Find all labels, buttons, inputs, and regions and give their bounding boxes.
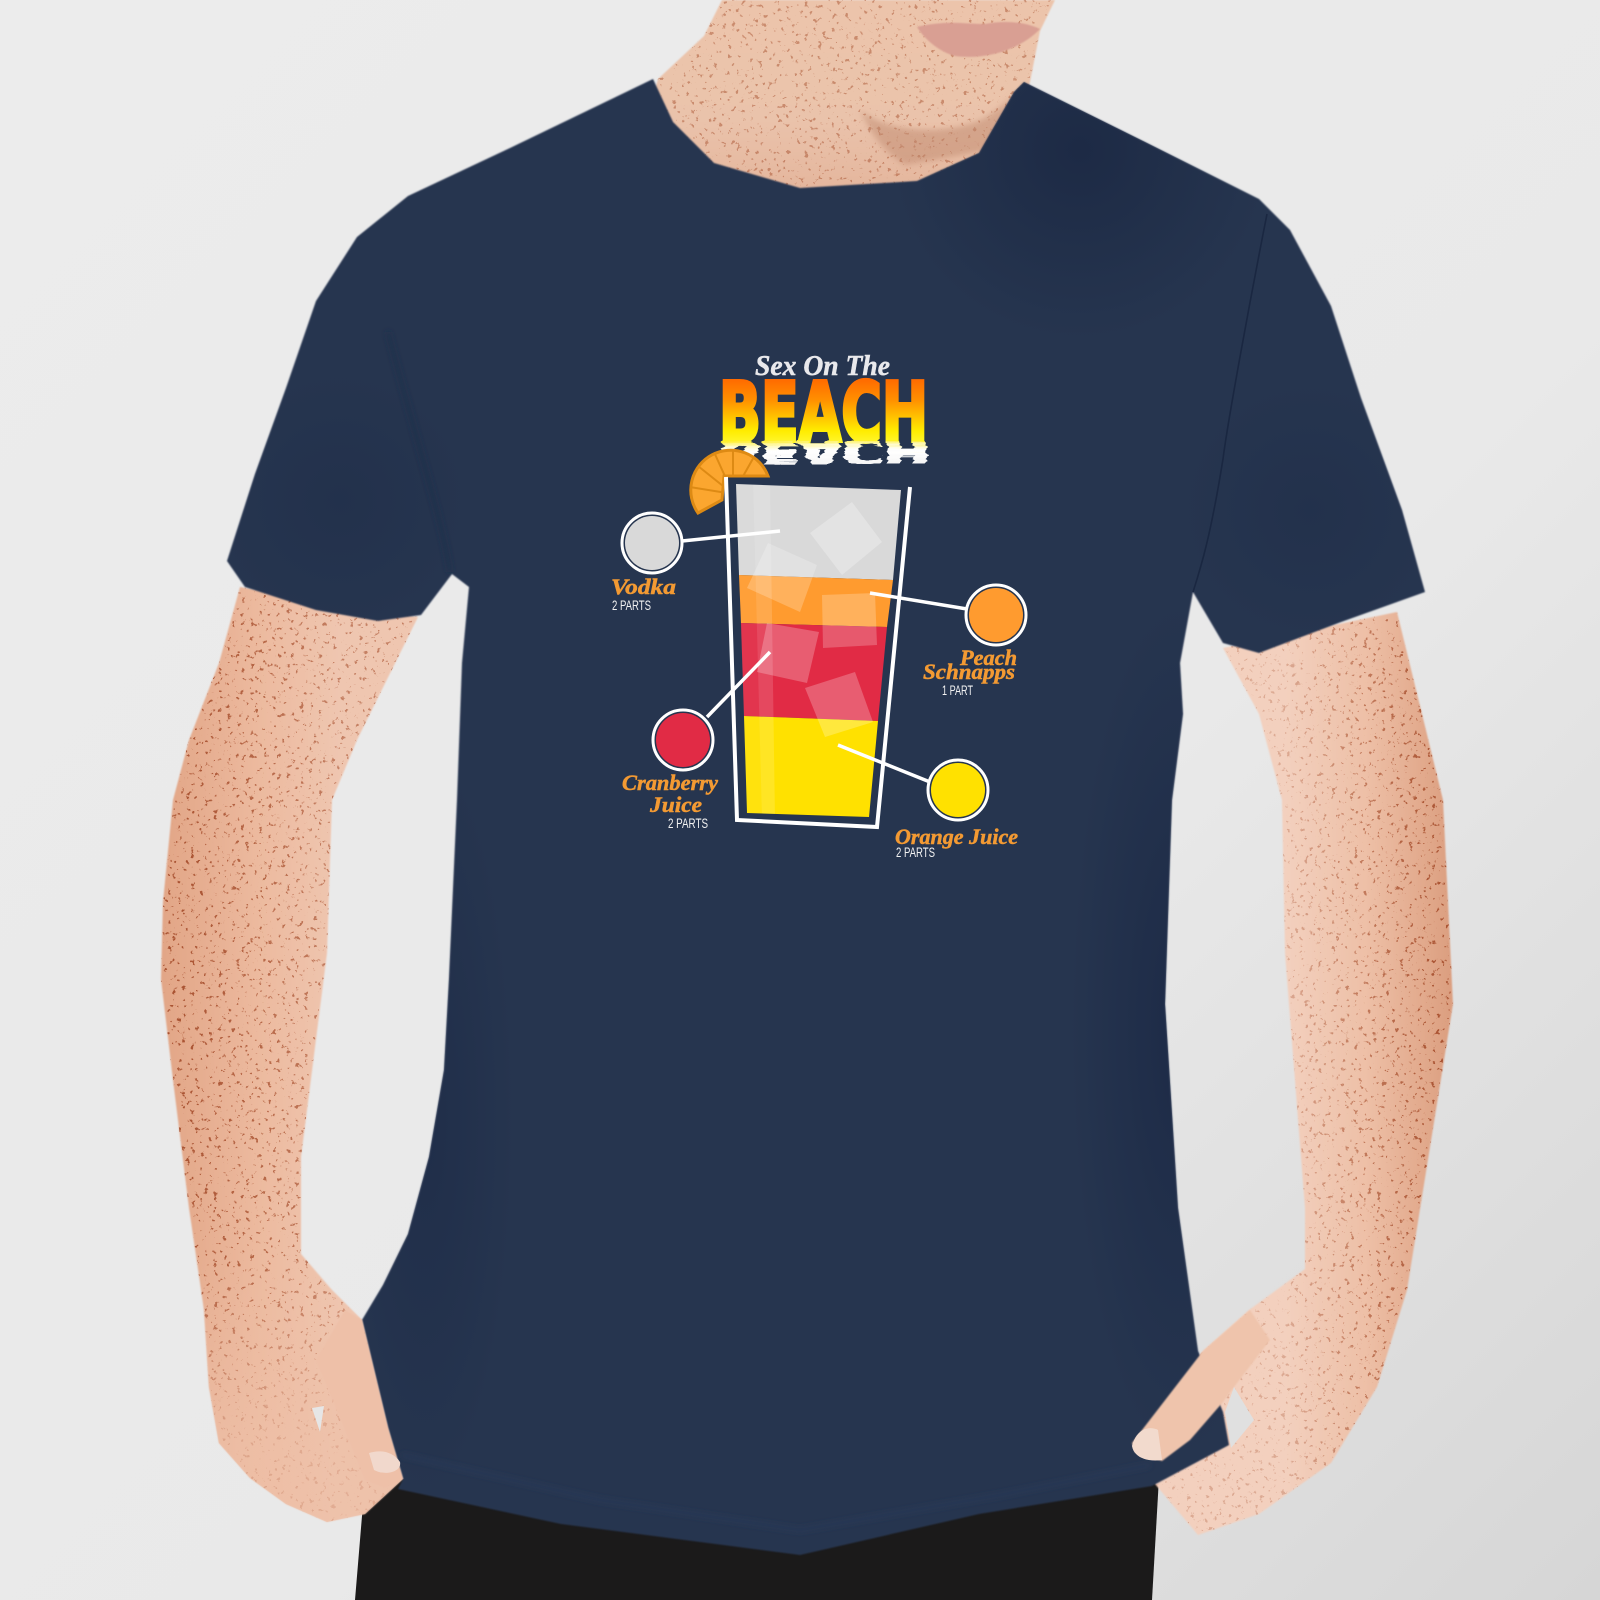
cranberry juice callout: Cranberry: [622, 770, 718, 795]
cranberry juice callout: [622, 652, 770, 831]
vodka layer: [736, 484, 901, 580]
collar shadow: [918, 82, 1240, 202]
navy t-shirt: [210, 60, 1440, 1555]
icon: orange slice: [690, 448, 768, 513]
cranberry juice layer: [741, 623, 887, 721]
vodka callout: 2 PARTS: [612, 597, 651, 613]
right thumb over shirt: [1132, 1310, 1270, 1461]
peach schnapps layer: [739, 575, 893, 627]
left sleeve fold shading: [242, 432, 270, 514]
torso right side shading: [1155, 660, 1200, 1355]
glass liquid layers: [736, 480, 901, 820]
hem fold line: [402, 1455, 1150, 1530]
vodka callout: Vodka: [611, 574, 676, 599]
cranberry juice callout: Juice: [649, 792, 702, 817]
sleeve seams: [1193, 214, 1267, 592]
shirt shading, clipped to the garment: [210, 60, 1440, 1500]
left arm and hand: [161, 587, 418, 1522]
thumbnail: [1132, 1428, 1162, 1460]
lips: [917, 22, 1040, 57]
right sleeve fold shading: [1376, 438, 1407, 528]
thumbnail: [369, 1451, 400, 1473]
orange juice callout: 2 PARTS: [896, 844, 935, 860]
gap between thumb and fingers: [312, 1406, 324, 1432]
vodka callout: [611, 513, 780, 613]
printed infographic: [611, 350, 1026, 860]
right arm and hand: [1155, 612, 1453, 1535]
title reflection: BEACH: [719, 433, 928, 471]
black trousers: [355, 1460, 1160, 1600]
left thumb over shirt: [312, 1310, 403, 1488]
peach schnapps callout: [870, 585, 1026, 698]
chin shadow: [860, 92, 1014, 165]
title: BEACH: BEACH: [719, 366, 928, 461]
orange juice callout: Orange Juice: [895, 824, 1018, 849]
peach schnapps callout: Peach: [959, 645, 1017, 670]
title: Sex On The: Sex On The: [755, 350, 890, 382]
glass outline: [726, 477, 910, 827]
neck and chin: [640, 0, 1055, 215]
cranberry juice callout: 2 PARTS: [668, 815, 708, 831]
torso left side shading: [369, 844, 456, 1308]
peach schnapps callout: Schnapps: [923, 659, 1015, 684]
gap between thumb and fingers: [1225, 1387, 1254, 1448]
orange juice callout: [838, 745, 1018, 860]
back of left hand: [200, 1260, 403, 1522]
orange juice layer: [744, 716, 878, 817]
ice cubes and highlights: [736, 480, 882, 820]
peach schnapps callout: 1 PART: [942, 682, 973, 698]
